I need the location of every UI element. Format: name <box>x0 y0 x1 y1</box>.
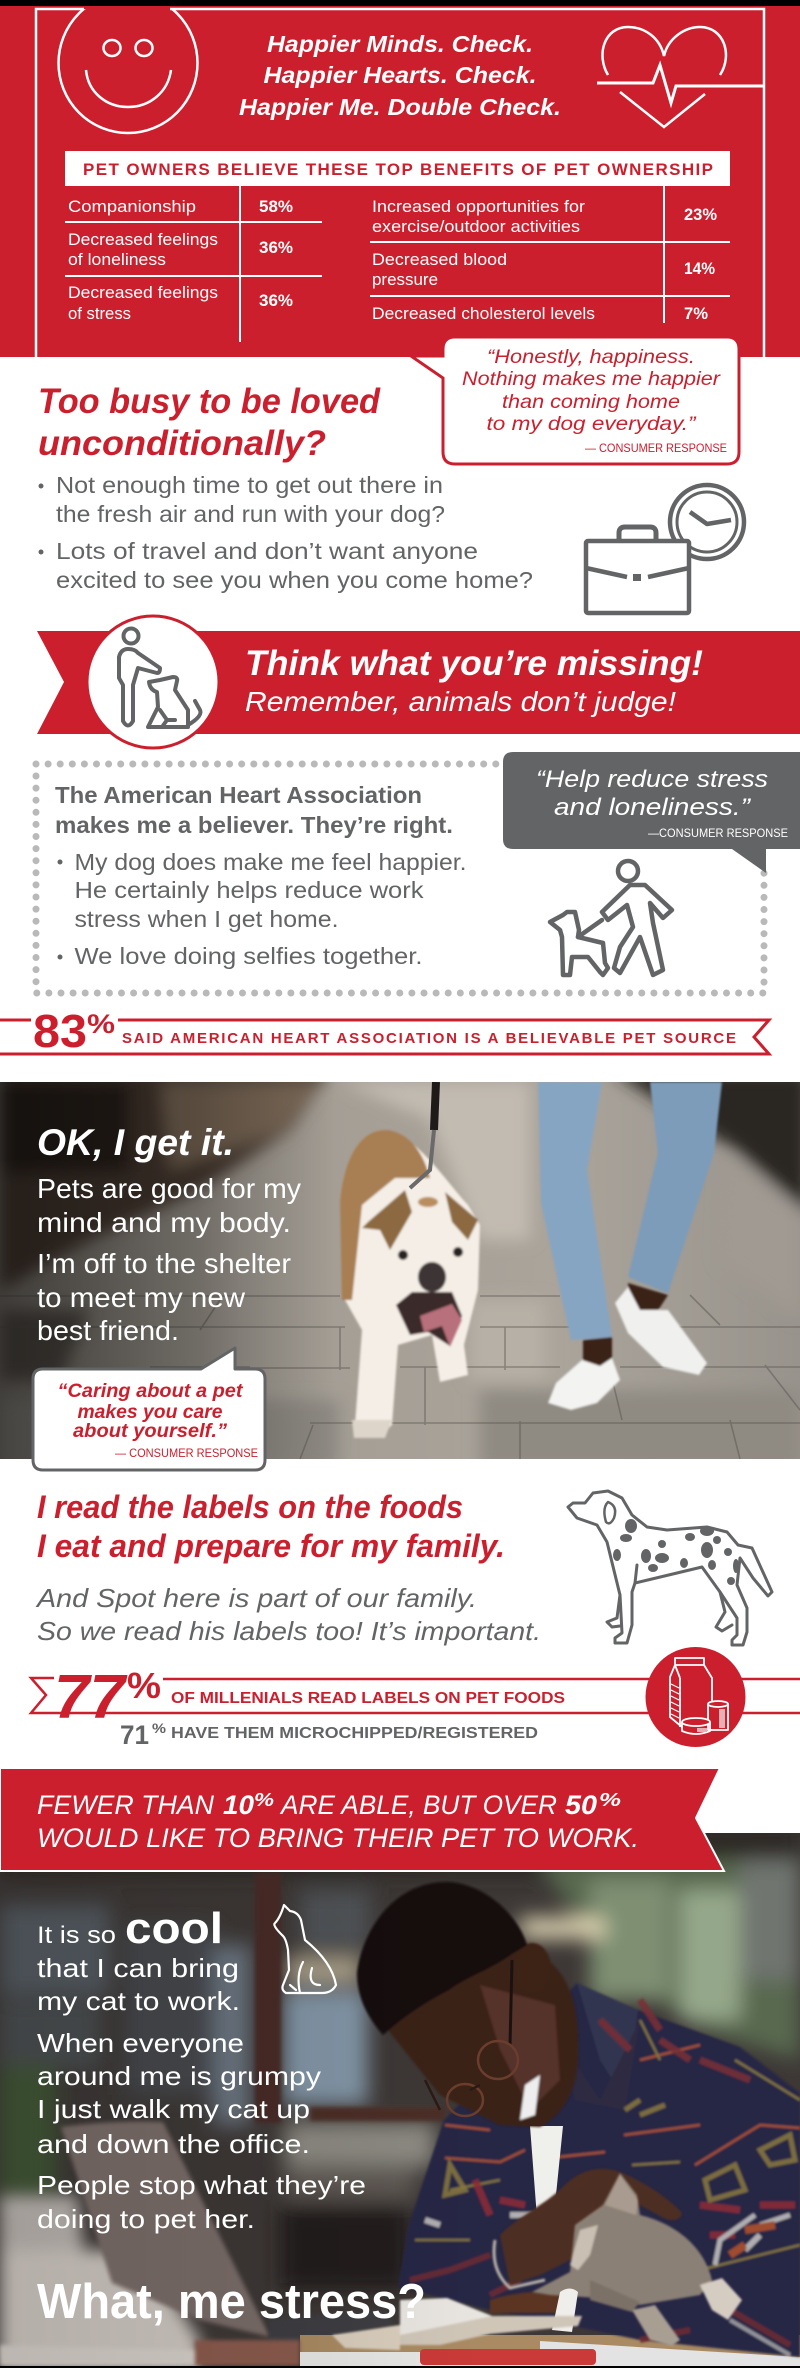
callout: caring about a pet: about yourself.” <box>73 1421 228 1442</box>
table heading bar <box>65 151 730 186</box>
laptop <box>61 2122 270 2337</box>
man shirt <box>398 1983 800 2357</box>
text block: ok I get it: Pets are good for my <box>37 1173 301 1204</box>
text block: cool cat at work: around me is grumpy <box>37 2061 321 2091</box>
table: left benefits: 36% <box>259 238 293 257</box>
table: right benefits: 14% <box>684 259 715 278</box>
panel frame <box>36 9 764 357</box>
paper on desk <box>300 2352 540 2366</box>
panel: american heart association <box>36 752 800 993</box>
callout: help reduce stress: —CONSUMER RESPONSE <box>648 826 788 840</box>
text block: cool cat at work: When everyone <box>37 2028 244 2058</box>
text block: ok I get it: mind and my body. <box>37 1207 291 1238</box>
text block: cool cat at work: It is so <box>37 1922 116 1949</box>
headline: happier checks: Happier Minds. Check. <box>267 31 533 57</box>
text block: cool cat at work: doing to pet her. <box>37 2204 255 2234</box>
callout: honestly happiness quote: “Honestly, happiness. <box>487 347 695 368</box>
text block: ok I get it <box>37 1122 301 1346</box>
secondary stat: 71 percent: HAVE THEM MICROCHIPPED/REGISTERED <box>171 1725 538 1742</box>
callout: caring about a pet <box>33 1348 265 1470</box>
callout: help reduce stress <box>503 752 800 873</box>
white undershirt <box>530 2126 563 2218</box>
ribbon stat: 77 percent: 77 <box>54 1663 128 1732</box>
table: left benefits: 36% <box>259 291 293 310</box>
cat <box>532 2173 742 2346</box>
callout: caring about a pet: makes you care <box>78 1402 223 1423</box>
text block: believer bullets: He certainly helps reduce work <box>74 877 424 903</box>
text block: too busy bullets: the fresh air and run with your dog? <box>56 501 445 527</box>
pavement joints <box>0 1295 800 1459</box>
icon: smiley face <box>58 0 198 133</box>
ribbon stat: 77 percent <box>31 1663 800 1750</box>
beams <box>255 1873 445 2123</box>
text block: spot is part of our family: So we read his labels too! It’s important. <box>37 1616 541 1646</box>
table: left benefits: of loneliness <box>68 250 166 269</box>
heading: too busy to be loved: unconditionally? <box>38 424 326 463</box>
icon: person walking dog <box>550 861 672 975</box>
white cup <box>552 2288 578 2332</box>
text block: ok I get it: OK, I get it. <box>37 1122 234 1163</box>
table: left benefits: of stress <box>68 304 131 323</box>
callout: caring about a pet: — CONSUMER RESPONSE <box>115 1448 258 1460</box>
banner: think what you're missing: Remember, animals don’t judge! <box>245 686 676 717</box>
table: right benefits: Increased opportunities for <box>372 197 585 216</box>
heading: american heart association <box>55 782 453 838</box>
banner: think what you're missing: Think what you’re missing! <box>245 644 703 683</box>
heading: I read the labels <box>37 1489 505 1564</box>
text block: too busy bullets: Not enough time to get out there in <box>56 472 443 498</box>
text block: ok I get it: I’m off to the shelter <box>37 1248 291 1279</box>
heading: I read the labels: I eat and prepare for my family. <box>37 1528 505 1564</box>
ribbon stat: 83 percent: SAID AMERICAN HEART ASSOCIATION IS A BELIEVABLE PET SOURCE <box>122 1030 736 1047</box>
photo: bulldog on a leash <box>0 1070 800 1470</box>
table: right benefits: 7% <box>684 304 708 323</box>
heading: american heart association: The American Heart Association <box>55 782 422 808</box>
text block: ok I get it: best friend. <box>37 1315 179 1346</box>
hand and wrist <box>490 2169 682 2313</box>
table: right benefits: exercise/outdoor activities <box>372 217 580 236</box>
ribbon stat: 83 percent: 83 <box>33 1005 87 1057</box>
callout: honestly happiness quote: than coming home <box>502 392 680 413</box>
glasses <box>425 1960 518 2116</box>
banner: bring pet to work: ARE ABLE, BUT OVER <box>279 1790 557 1820</box>
banner: think what you're missing <box>37 616 800 748</box>
banner: bring pet to work: WOULD LIKE TO BRING THEIR PET TO WORK. <box>37 1823 639 1853</box>
callout: honestly happiness quote: Nothing makes me happier <box>462 369 721 390</box>
top edge strip <box>0 0 800 6</box>
banner: bring pet to work <box>0 1768 724 1871</box>
table: left benefits <box>65 186 322 342</box>
banner: bring pet to work: % <box>599 1790 621 1810</box>
text block: cool cat at work <box>37 1904 366 2234</box>
blurred office background <box>0 1830 800 2290</box>
banner: bring pet to work: FEWER THAN <box>37 1790 214 1820</box>
icon: sitting cat <box>274 1905 336 1993</box>
secondary stat: 71 percent <box>120 1720 538 1750</box>
closing line: what me stress: What, me stress? <box>37 2275 426 2329</box>
text block: cool cat at work: that I can bring <box>37 1953 239 1983</box>
table: right benefits: Decreased blood <box>372 250 507 269</box>
desk items <box>0 2195 200 2368</box>
head and hair <box>357 1882 578 2127</box>
text block: too busy bullets: Lots of travel and don’t want anyone <box>56 538 478 564</box>
table heading bar: PET OWNERS BELIEVE THESE TOP BENEFITS OF PET OWNERSHIP <box>83 160 713 179</box>
text block: cool cat at work: People stop what they’re <box>37 2170 366 2200</box>
headline: happier checks: Happier Hearts. Check. <box>264 62 536 88</box>
text block: cool cat at work: I just walk my cat up <box>37 2094 310 2124</box>
legs and shoes <box>538 1082 722 1410</box>
dog <box>340 1130 480 1438</box>
table: right benefits: pressure <box>372 270 438 289</box>
text block: cool cat at work: my cat to work. <box>37 1986 240 2016</box>
text block: believer bullets: stress when I get home. <box>74 906 338 932</box>
heading: I read the labels: I read the labels on the foods <box>37 1489 463 1525</box>
callout: caring about a pet: “Caring about a pet <box>58 1381 243 1402</box>
icon: briefcase and clock <box>586 485 744 613</box>
text block: too busy bullets <box>38 472 533 593</box>
banner: bring pet to work: 50 <box>565 1790 597 1820</box>
photo: man with cat at desk <box>0 1830 800 2368</box>
table: left benefits: Decreased feelings <box>68 283 218 302</box>
table: right benefits: Decreased cholesterol levels <box>372 304 595 323</box>
text block: believer bullets: We love doing selfies together. <box>74 943 423 969</box>
text block: believer bullets <box>58 849 466 969</box>
callout: honestly happiness quote: — CONSUMER RESPONSE <box>585 443 727 455</box>
banner: bring pet to work: 10 <box>223 1790 254 1820</box>
callout: help reduce stress: “Help reduce stress <box>536 766 768 793</box>
headline: happier checks <box>239 31 561 120</box>
ribbon stat: 77 percent: % <box>127 1665 161 1706</box>
text block: spot is part of our family <box>35 1583 541 1646</box>
icon: heart with pulse line <box>597 27 764 127</box>
icon: person petting dog <box>87 616 219 748</box>
headline: happier checks: Happier Me. Double Check. <box>239 94 561 120</box>
ribbon stat: 77 percent: OF MILLENIALS READ LABELS ON PET FOODS <box>171 1690 565 1707</box>
leash <box>434 1082 436 1130</box>
table: left benefits: Decreased feelings <box>68 230 218 249</box>
callout: honestly happiness quote: to my dog everyday.” <box>486 414 697 435</box>
open book and plate <box>332 2298 582 2350</box>
table: right benefits: 23% <box>684 205 717 224</box>
icon: pet food bag and cans <box>646 1647 746 1747</box>
secondary stat: 71 percent: 71 <box>120 1720 149 1750</box>
text block: too busy bullets: excited to see you when you come home? <box>56 567 533 593</box>
secondary stat: 71 percent: % <box>152 1720 167 1736</box>
ribbon stat: 83 percent <box>0 1005 769 1057</box>
text block: believer bullets: My dog does make me feel happier. <box>74 849 466 875</box>
heading: too busy to be loved <box>38 382 381 463</box>
desk surface <box>300 2335 800 2357</box>
text block: ok I get it: to meet my new <box>37 1282 246 1313</box>
text block: cool cat at work: and down the office. <box>37 2129 310 2159</box>
text block: spot is part of our family: And Spot here is part of our family. <box>35 1583 477 1613</box>
red book on desk <box>420 2349 596 2365</box>
table: right benefits <box>370 186 730 323</box>
left shade <box>0 1904 362 2366</box>
panel: benefits of pet ownership <box>0 0 800 357</box>
callout: help reduce stress: and loneliness.” <box>554 794 751 821</box>
text block: cool cat at work: cool <box>125 1904 223 1953</box>
heading: american heart association: makes me a believer. They’re right. <box>55 812 453 838</box>
left shade <box>0 1082 311 1459</box>
heading: too busy to be loved: Too busy to be loved <box>38 382 381 421</box>
banner: bring pet to work: % <box>254 1790 274 1810</box>
bottom edge strip <box>0 2366 800 2368</box>
callout: honestly happiness quote <box>411 337 739 464</box>
table: left benefits: 58% <box>259 197 293 216</box>
icon: dalmatian <box>568 1491 772 1645</box>
buildings and distant pavement <box>0 1070 800 1470</box>
ribbon stat: 83 percent: % <box>87 1009 115 1039</box>
table: left benefits: Companionship <box>68 197 196 216</box>
